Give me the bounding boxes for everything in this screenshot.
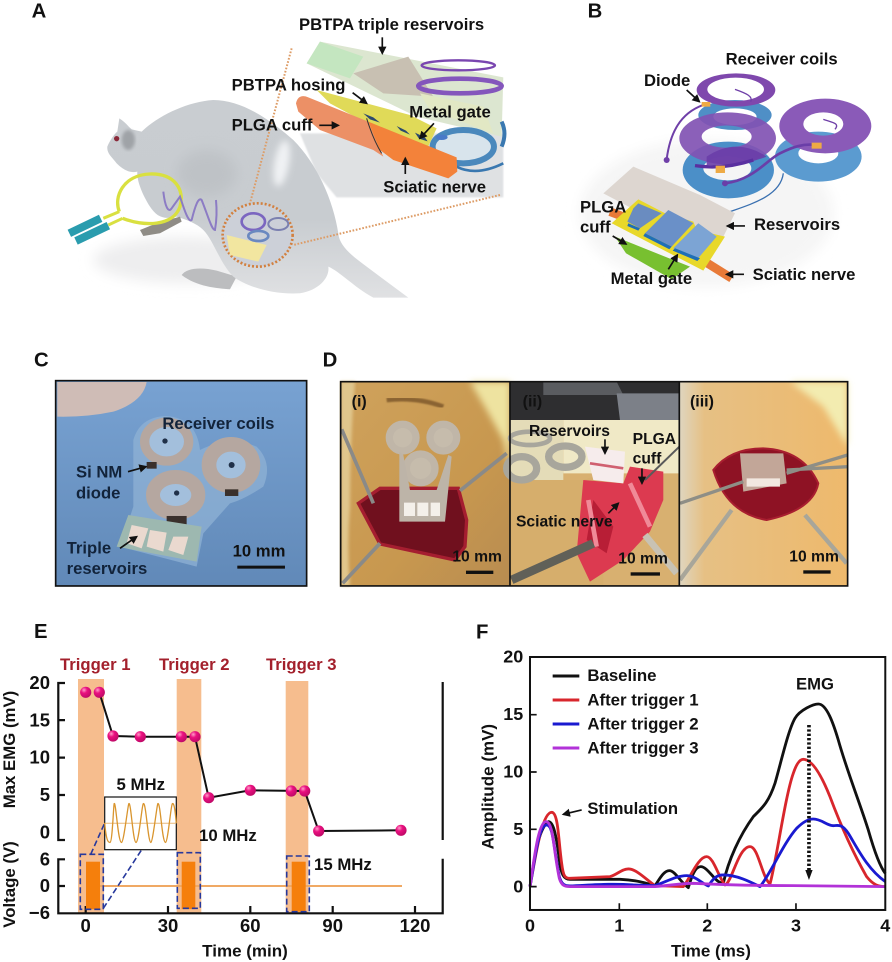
y tick labels: 0 — [40, 875, 50, 896]
legend — [553, 666, 699, 757]
orange nerve — [610, 212, 732, 278]
scale bar i — [466, 571, 493, 574]
x tick labels: 2 — [702, 916, 712, 936]
arrow: housing — [353, 93, 367, 103]
label: reservoirs: reservoirs — [67, 559, 147, 578]
curve: baseline — [530, 704, 885, 888]
trigger labels — [60, 655, 336, 674]
panel letter F: F — [476, 621, 488, 643]
voltage baseline — [100, 885, 402, 887]
curve: after trigger 2 — [530, 819, 885, 887]
dashed zoom boxes — [80, 823, 309, 912]
blue lower coils — [683, 100, 862, 198]
label: metal gate: Metal gate — [409, 102, 491, 121]
trigger bands — [78, 679, 308, 913]
device substrate — [120, 416, 267, 567]
arrow: stimulation — [563, 810, 582, 814]
torso and tail — [107, 100, 408, 298]
scale bar — [237, 566, 285, 569]
label: PLGA cuff: PLGA cuff — [232, 116, 313, 135]
y tick labels: 10 — [503, 762, 523, 782]
label: PBTPA housing: PBTPA hosing — [232, 76, 345, 95]
label: Si NM: Si NM — [76, 462, 122, 481]
arrow: diode — [128, 467, 146, 472]
label: cuff: cuff — [580, 218, 611, 237]
y tick labels: 0 — [513, 876, 523, 896]
y tick labels: 6 — [40, 848, 50, 870]
label: ii: (ii) — [523, 394, 542, 411]
panel C: device photograph — [34, 350, 307, 586]
label: 5 MHz: 5 MHz — [116, 775, 165, 794]
x tick labels: 60 — [240, 915, 261, 936]
yellow plate — [612, 199, 725, 271]
EMG data points — [80, 687, 407, 837]
y axis title: voltage: Voltage (V) — [0, 841, 19, 928]
EMG connecting line — [99, 692, 401, 831]
axes frame — [530, 657, 885, 910]
panel letter A: A — [32, 0, 47, 22]
legend: After trigger 2 — [587, 714, 699, 733]
panel E: max EMG and voltage vs time — [0, 621, 443, 960]
inset: device exploded view — [296, 42, 504, 178]
y tick labels — [503, 646, 523, 896]
scale bar iii — [803, 570, 831, 574]
coil leads and diodes — [664, 89, 837, 217]
arrow: EMG decrease — [805, 725, 813, 880]
reservoir pads — [627, 203, 717, 261]
label: receiver coils: Receiver coils — [162, 414, 274, 433]
y tick labels: 10 — [29, 746, 50, 768]
axis ticks — [530, 715, 796, 910]
y tick labels: 5 — [40, 784, 50, 805]
photo frame — [56, 381, 307, 586]
inset shadow background — [300, 133, 503, 197]
panel letter C: C — [34, 350, 49, 372]
label: sciatic nerve: Sciatic nerve — [753, 265, 855, 284]
photo background — [56, 381, 307, 586]
implanted device circle — [223, 203, 293, 267]
rat body — [107, 100, 408, 298]
trigger labels: Trigger 1 — [60, 655, 130, 674]
label: PLGA: PLGA — [633, 431, 676, 448]
panel A: rat with implanted device — [32, 0, 504, 298]
panel B: device schematic — [580, 0, 871, 288]
label: reservoirs: Reservoirs — [529, 423, 610, 440]
receiver coils in inset — [422, 60, 495, 70]
curve: after trigger 3 — [530, 822, 885, 887]
label: metal gate: Metal gate — [611, 269, 692, 288]
photo ii — [507, 382, 679, 586]
arrow: sciatic nerve — [727, 272, 744, 277]
grey corner — [57, 382, 147, 417]
metal gates — [363, 113, 428, 141]
y tick labels: 15 — [29, 710, 50, 730]
arrow: sciatic nerve — [403, 158, 408, 174]
arrow: cuff — [613, 236, 626, 244]
y axis title: EMG: Max EMG (mV) — [0, 691, 19, 808]
axes — [58, 682, 443, 913]
photo i — [341, 382, 510, 586]
label: sciatic nerve: Sciatic nerve — [383, 178, 486, 197]
head shading and eye — [122, 130, 135, 150]
voltage pulses — [86, 862, 306, 912]
label: iii: (iii) — [690, 394, 714, 411]
label: diode: Diode — [644, 71, 690, 90]
x tick labels: 120 — [400, 915, 430, 936]
label: triple: Triple — [67, 538, 111, 557]
arrow: reservoirs — [120, 537, 137, 548]
label: EMG: EMG — [796, 675, 834, 694]
scale label iii: 10 mm — [789, 549, 839, 566]
arrow: reservoirs — [602, 439, 607, 453]
arrow: cuff — [639, 468, 644, 483]
purple receiver coils — [679, 73, 871, 166]
triple reservoirs — [307, 42, 503, 137]
wireless transmitter coil — [69, 174, 181, 241]
diodes and pads — [147, 438, 238, 525]
x tick labels: 30 — [158, 915, 178, 936]
y tick labels: 5 — [513, 819, 523, 839]
x tick labels: 0 — [525, 916, 535, 936]
y tick labels: 20 — [503, 646, 523, 666]
panel F: EMG amplitude curves — [476, 621, 890, 961]
label: 15 MHz: 15 MHz — [314, 855, 372, 874]
hind foot — [182, 268, 237, 289]
scale label: 10 mm — [233, 542, 285, 561]
arrow: metal gate — [668, 255, 677, 269]
x tick labels — [81, 915, 430, 936]
x tick labels: 3 — [791, 916, 801, 936]
y axis title: Amplitude (mV) — [478, 724, 497, 849]
soft shadow — [580, 140, 833, 287]
y tick labels: −6 — [29, 902, 50, 923]
triple reservoir block — [117, 515, 202, 562]
arrow: metal gate — [420, 123, 434, 138]
scale bar ii — [631, 572, 660, 576]
front paw — [140, 217, 182, 236]
x axis title: Time (ms) — [671, 942, 751, 961]
arrow: triple reservoirs — [380, 37, 385, 53]
inset 5 MHz waveform — [105, 797, 176, 850]
x tick labels: 0 — [81, 915, 91, 936]
panel letter D: D — [323, 350, 337, 372]
body shadow — [177, 150, 237, 197]
legend: Baseline — [587, 666, 657, 685]
arrow: PLGA cuff — [319, 123, 338, 128]
panel D: surgical photographs — [323, 350, 848, 586]
label: sciatic nerve: Sciatic nerve — [516, 514, 613, 531]
x tick labels: 90 — [322, 915, 343, 936]
trigger labels: Trigger 3 — [266, 655, 336, 674]
arrow: sciatic nerve — [608, 503, 618, 513]
label: 10 MHz: 10 MHz — [199, 826, 257, 845]
arrow: reservoirs — [727, 223, 745, 228]
label: PBTPA triple reservoirs: PBTPA triple reservoirs — [299, 15, 484, 34]
yellow housing — [317, 90, 437, 150]
x tick labels: 1 — [614, 916, 624, 936]
panel letter B: B — [588, 0, 602, 22]
panel letter E: E — [34, 621, 48, 643]
y tick labels — [29, 672, 50, 923]
y tick labels: 20 — [29, 672, 50, 693]
scale label ii: 10 mm — [618, 550, 668, 567]
label: reservoirs: Reservoirs — [754, 215, 840, 234]
legend: After trigger 3 — [587, 738, 699, 757]
body highlight — [270, 139, 293, 188]
y tick labels: 0 — [40, 822, 50, 842]
photo iii — [679, 382, 848, 586]
photo frames — [341, 382, 848, 586]
label: stimulation: Stimulation — [587, 799, 678, 818]
y tick labels: 15 — [503, 704, 523, 724]
dotted callout lines — [250, 48, 500, 245]
x tick labels: 4 — [880, 916, 890, 936]
PLGA cuff over nerve — [296, 96, 383, 157]
label: PLGA cuff: PLGA — [580, 197, 626, 216]
label: diode: diode — [76, 483, 120, 502]
receiver coils photo — [145, 422, 253, 513]
rat shadow — [93, 237, 280, 283]
label: receiver coils: Receiver coils — [726, 49, 838, 68]
label: i: (i) — [352, 394, 367, 411]
curve: after trigger 1 — [530, 759, 885, 887]
x tick labels — [525, 916, 890, 936]
green PLGA base — [615, 237, 690, 279]
legend: After trigger 1 — [587, 690, 699, 709]
x axis title: Time (min) — [202, 942, 288, 960]
trigger labels: Trigger 2 — [159, 655, 229, 674]
translucent housing — [603, 167, 735, 237]
arrow: diode — [687, 90, 699, 102]
scale label i: 10 mm — [452, 549, 502, 566]
label: cuff: cuff — [633, 450, 662, 467]
purple wireless signal — [163, 192, 217, 230]
